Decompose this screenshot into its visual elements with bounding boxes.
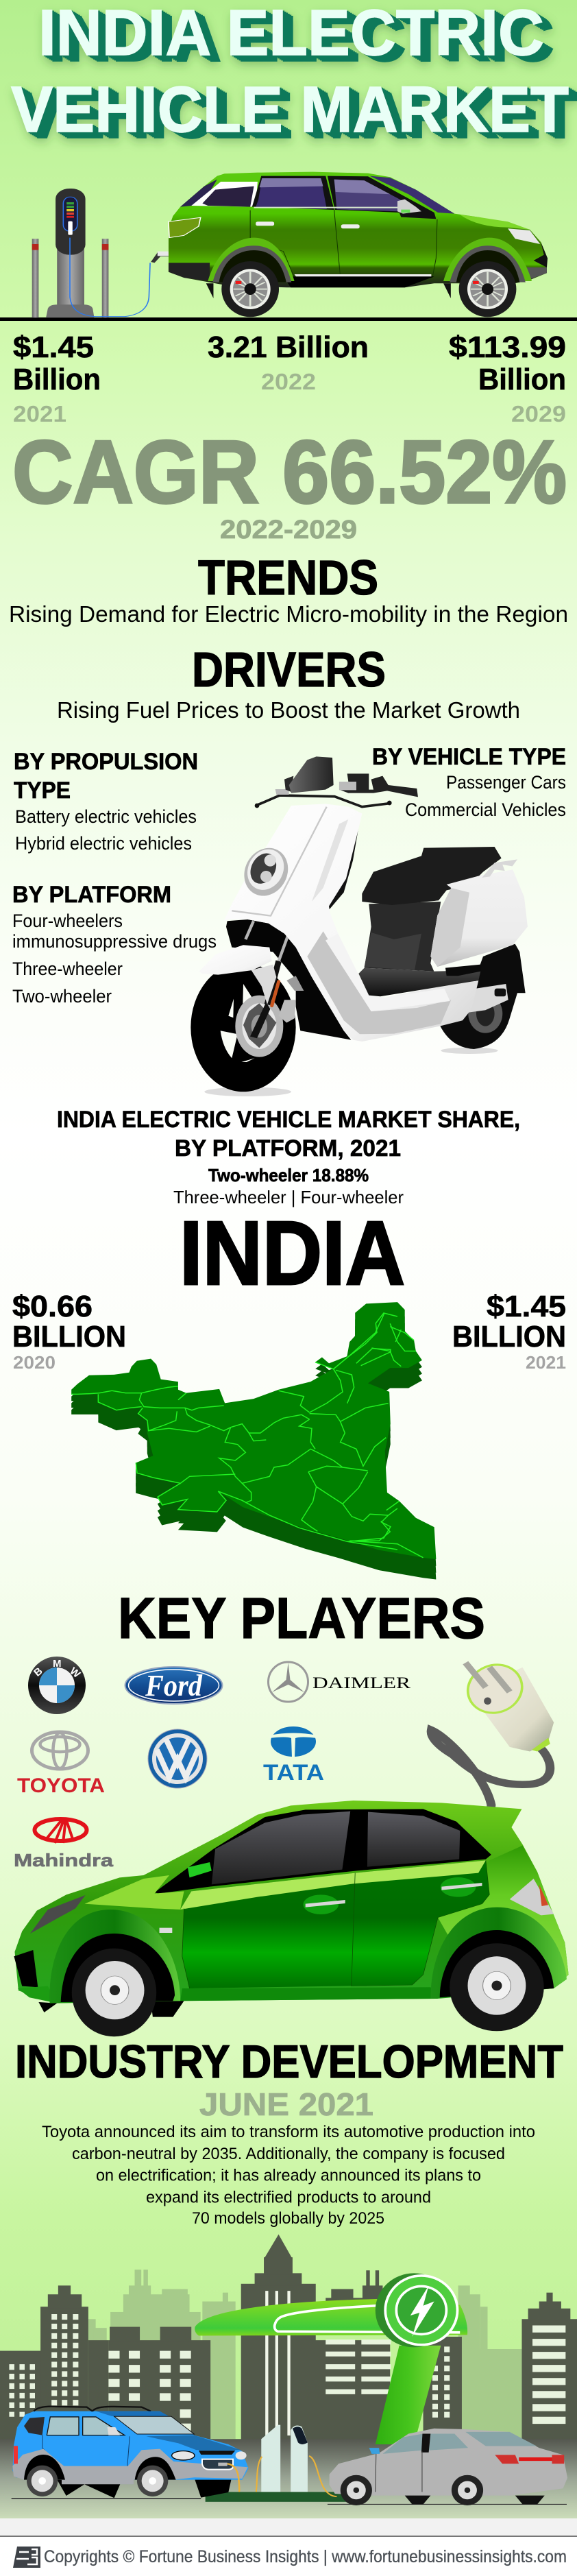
station columns (267, 2291, 289, 2435)
stat: 2029 value: $113.99 (449, 330, 566, 364)
footer panel (0, 2536, 577, 2576)
logo: Toyota: TOYOTA (17, 1774, 105, 1797)
chargers (261, 2425, 280, 2492)
stat: 2021 value: 2021 (13, 401, 66, 426)
stat: india 2020: 2020 (13, 1352, 56, 1373)
panel: by propulsion type: Battery electric vehicles (15, 806, 197, 827)
building windows (9, 2314, 565, 2431)
stat: 2029 value (449, 330, 566, 426)
door panels (182, 1860, 489, 1988)
stat: india 2020: $0.66 (12, 1290, 93, 1323)
text: development description: 70 models globally by 2025 (192, 2209, 384, 2228)
stat: 2021 value: $1.45 (13, 330, 94, 364)
illustration: city skyline with charging station (0, 2235, 577, 2518)
panel: by propulsion type: BY PROPULSION (14, 749, 198, 775)
rear wheel (450, 1943, 544, 2031)
illustration: silver sedan (328, 2429, 567, 2505)
text: drivers description: Rising Fuel Prices to Boost the Market Growth (57, 697, 520, 723)
illustration: blue SUV (12, 2407, 249, 2499)
heading: india: INDIA (180, 1203, 405, 1303)
stat: 2029 value: Billion (478, 363, 566, 396)
state borders (71, 1313, 397, 1550)
illustration: white electric scooter (191, 756, 528, 1096)
wheels (221, 261, 279, 317)
scooter body (224, 804, 478, 1042)
heading: market share by platform: INDIA ELECTRIC VEHICLE MARKET SHARE, (57, 1107, 520, 1133)
scooter handlebar (256, 795, 389, 807)
text: development description: Toyota announced its aim to transform its automotive production into (42, 2123, 535, 2141)
logo: BMW: B (32, 1665, 45, 1679)
scooter under-shield (226, 919, 351, 1040)
logo: Daimler: DAIMLER (312, 1674, 411, 1692)
panel: by vehicle type: Commercial Vehicles (405, 799, 566, 820)
heading: market share by platform: BY PLATFORM, 2021 (175, 1135, 401, 1161)
stat: india 2021: $1.45 (487, 1290, 566, 1323)
illustration: green hatchback (14, 1801, 569, 2036)
panel: by vehicle type: Passenger Cars (446, 772, 566, 793)
logo: Mahindra: Mahindra (14, 1850, 114, 1870)
title: VEHICLE MARKET (11, 73, 569, 146)
logo: Ford: Ford (145, 1669, 203, 1702)
text: trends description: Rising Demand for Electric Micro-mobility in the Region (9, 601, 568, 627)
logo: Volkswagen (148, 1729, 207, 1788)
station emblem (376, 2273, 453, 2347)
heading: key players: KEY PLAYERS (118, 1586, 485, 1650)
icon: Fortune Business Insights logo (13, 2547, 40, 2568)
logo: BMW (28, 1657, 86, 1714)
text: other platforms: Three-wheeler | Four-wheeler (173, 1187, 404, 1207)
stat: 2022 value: 3.21 Billion (208, 330, 369, 364)
text: two-wheeler share: Two-wheeler 18.88% (208, 1165, 369, 1185)
map of India (71, 1302, 436, 1580)
panel: by propulsion type (14, 749, 198, 854)
heading: market share by platform (57, 1107, 520, 1161)
wheel arches (49, 1910, 180, 2003)
text: development description: expand its electrified products to around (146, 2189, 431, 2206)
logo: BMW: M (53, 1658, 62, 1670)
logo: Toyota (17, 1732, 105, 1797)
panel: by vehicle type (372, 744, 566, 820)
scooter headlight (236, 840, 296, 904)
panel: by propulsion type: TYPE (14, 778, 71, 804)
scooter seat and trunk (365, 902, 441, 972)
stat: 2022 value (208, 330, 369, 394)
logo: Daimler (269, 1662, 411, 1702)
station canopy (195, 2298, 467, 2335)
stat: india 2020: BILLION (12, 1320, 126, 1353)
text: development description (42, 2123, 535, 2228)
panel: by platform: Two-wheeler (12, 986, 112, 1007)
station post (376, 2346, 441, 2444)
heading: drivers: DRIVERS (192, 643, 386, 697)
panel: by platform: BY PLATFORM (12, 882, 171, 908)
illustration: plug and cable (431, 1657, 554, 1833)
stat: india 2020 (12, 1290, 126, 1373)
stat: 2029 value: 2029 (511, 401, 566, 426)
stat: 2021 value: Billion (13, 363, 101, 396)
panel: by platform: Three-wheeler (12, 959, 123, 979)
front fender arches (208, 238, 295, 281)
stat: india 2021 (452, 1290, 566, 1373)
panel: by vehicle type: BY VEHICLE TYPE (372, 744, 566, 770)
footer band (0, 2518, 577, 2536)
logo: Ford (125, 1667, 222, 1704)
stat: india 2021: 2021 (526, 1352, 566, 1373)
title (11, 0, 569, 146)
text: development description: on electrification; it has already announced its plans to (96, 2167, 481, 2184)
text: date: JUNE 2021 (199, 2086, 373, 2122)
panel: by platform: immunosuppressive drugs (12, 931, 217, 952)
panel: by propulsion type: Hybrid electric vehicles (15, 833, 192, 854)
ground line (0, 317, 577, 321)
panel: by platform (12, 882, 217, 1007)
logo: Tata (263, 1726, 324, 1785)
footer rule (0, 2536, 577, 2537)
front wheel (72, 1949, 156, 2036)
logo: Tata: TATA (263, 1760, 324, 1785)
stat: 2021 value (13, 330, 101, 426)
stat: india 2021: BILLION (452, 1320, 566, 1353)
logo: Mahindra (14, 1818, 114, 1870)
text: development description: carbon-neutral by 2035. Additionally, the company is focused (72, 2145, 505, 2163)
heading: trends: TRENDS (198, 551, 378, 605)
illustration: green SUV (169, 172, 548, 317)
stat: 2022 value: 2022 (261, 369, 316, 394)
icon: charging station (32, 189, 169, 317)
CAGR period: 2022-2029 (220, 516, 357, 544)
panel: by platform: Four-wheelers (12, 911, 123, 931)
road (0, 2439, 577, 2518)
logo: BMW: W (67, 1665, 83, 1681)
